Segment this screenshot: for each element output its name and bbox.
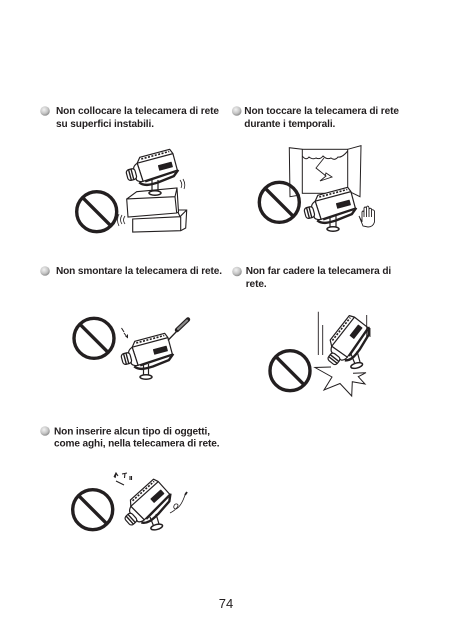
bullet (40, 106, 50, 116)
illustration: window with lightning (289, 146, 361, 197)
illustration: camera on stand (118, 333, 175, 379)
illustration: camera on stacked boxes (118, 149, 187, 232)
bullet (40, 266, 50, 276)
heading: Non inserire alcun tipo di oggetti, (54, 426, 210, 437)
icon: small arrows (122, 328, 128, 338)
illustration: camera on stand (301, 187, 358, 231)
heading: durante i temporali. (244, 119, 335, 130)
icon: hand (359, 206, 374, 227)
heading: rete. (246, 279, 267, 290)
heading: su superfici instabili. (56, 119, 154, 130)
heading: Non far cadere la telecamera di (246, 266, 391, 277)
illustration: impact star (315, 367, 366, 396)
page number: 74 (219, 596, 233, 611)
icon: prohibition sign (74, 318, 114, 358)
illustration: falling camera (320, 313, 374, 371)
heading: Non toccare la telecamera di rete (244, 106, 399, 117)
icon: prohibition sign (270, 351, 310, 391)
icon: screwdriver (168, 320, 188, 340)
item 5: do not insert objects (40, 426, 220, 533)
item 4: do not drop (232, 266, 391, 396)
icon: prohibition sign (77, 192, 117, 232)
icon: prohibition sign (259, 182, 299, 222)
bullet (40, 426, 50, 436)
heading: Non smontare la telecamera di rete. (56, 266, 222, 277)
icon: small objects (114, 473, 132, 485)
heading: Non collocare la telecamera di rete (56, 106, 219, 117)
bullet (232, 106, 242, 116)
item 1: unstable surface (40, 106, 219, 232)
heading: come aghi, nella telecamera di rete. (54, 439, 220, 450)
illustration: tilted camera on stand (118, 477, 175, 533)
bullet (232, 267, 242, 276)
icon: needle and thread (185, 492, 187, 495)
item 2: thunderstorm (232, 106, 399, 231)
item 3: do not disassemble (40, 266, 222, 379)
icon: thread (170, 495, 185, 513)
motion lines (318, 312, 370, 355)
icon: prohibition sign (73, 490, 113, 530)
